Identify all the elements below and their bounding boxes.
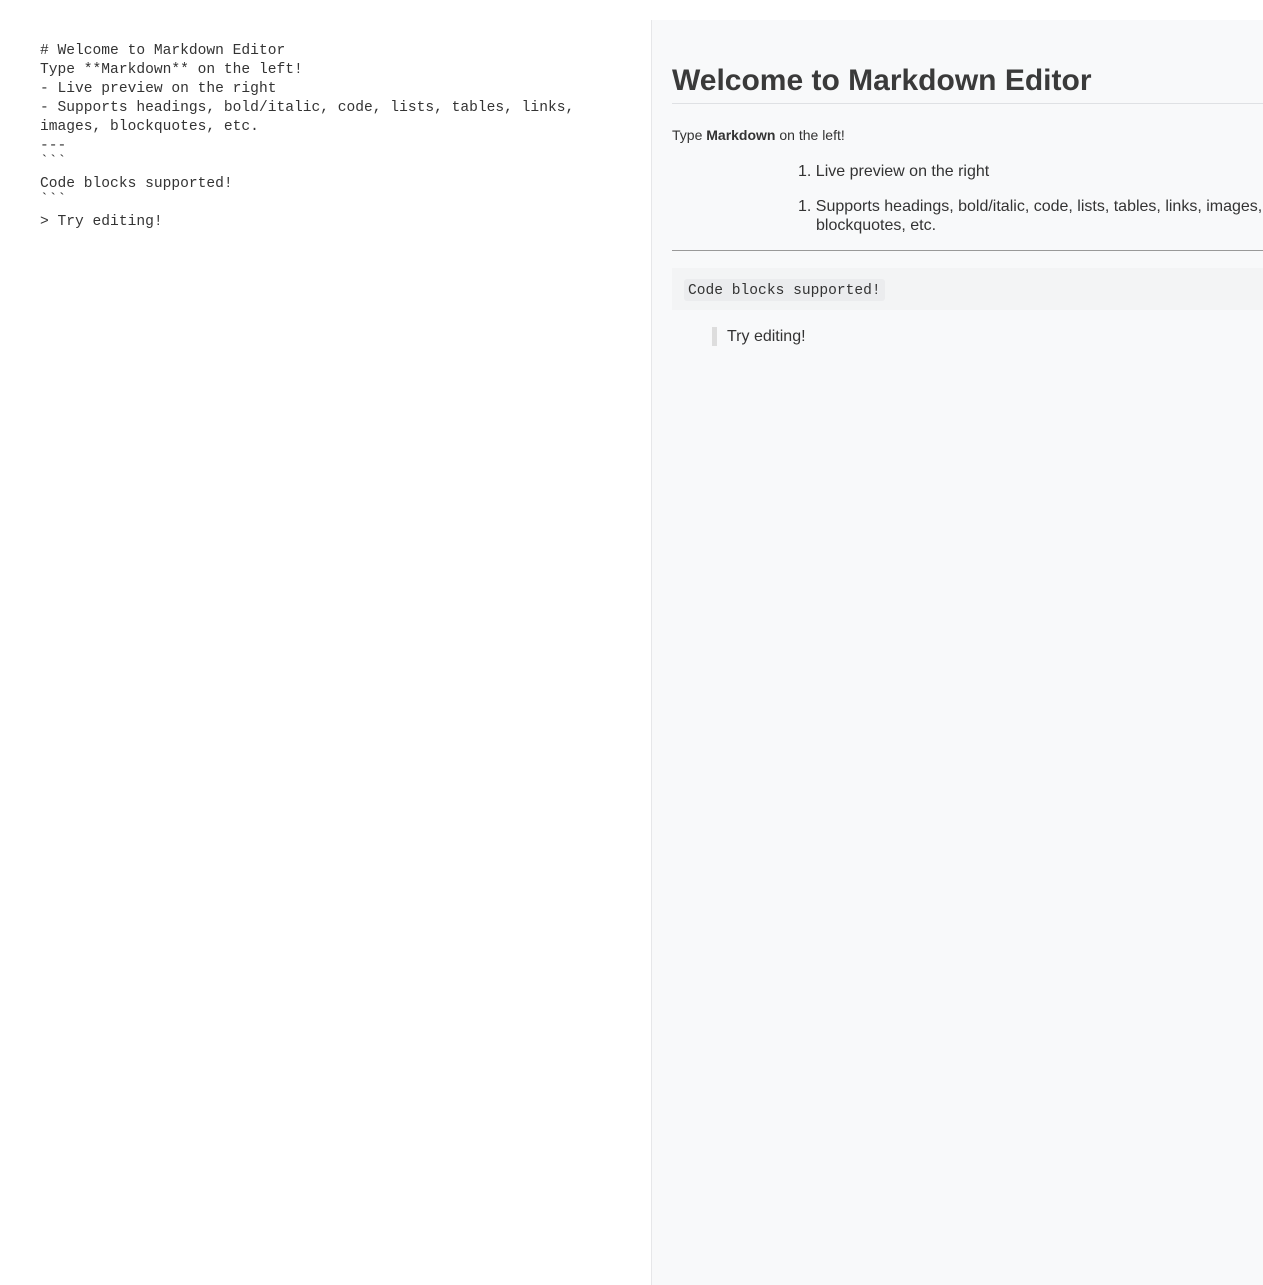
source text: ``` (40, 192, 66, 208)
source text: # Welcome to Markdown Editor (40, 43, 285, 59)
source text: > Try editing! (40, 214, 163, 230)
list: blockquotes, etc. (816, 217, 936, 234)
horizontal rule (672, 250, 1263, 251)
paragraph: Type Markdown on the left! (672, 127, 845, 143)
source text: - Live preview on the right (40, 81, 276, 97)
source text: images, blockquotes, etc. (40, 119, 259, 135)
panel: editor source (40, 43, 574, 230)
blockquote: Try editing! (727, 328, 806, 345)
panel: preview (651, 20, 1263, 1285)
heading: Welcome to Markdown Editor (672, 64, 1092, 97)
list: 1. Supports headings, bold/italic, code, lists, tables, links, images, (798, 198, 1262, 215)
source text: Code blocks supported! (40, 176, 233, 192)
source text: --- (40, 138, 66, 154)
code block (672, 268, 1263, 310)
source text (40, 43, 574, 230)
code block: Code blocks supported! (688, 283, 881, 299)
source text: ``` (40, 154, 66, 170)
source text: Type **Markdown** on the left! (40, 62, 303, 78)
list (798, 163, 1262, 234)
list: 1. Live preview on the right (798, 163, 989, 180)
source text: - Supports headings, bold/italic, code, lists, tables, links, (40, 100, 574, 116)
